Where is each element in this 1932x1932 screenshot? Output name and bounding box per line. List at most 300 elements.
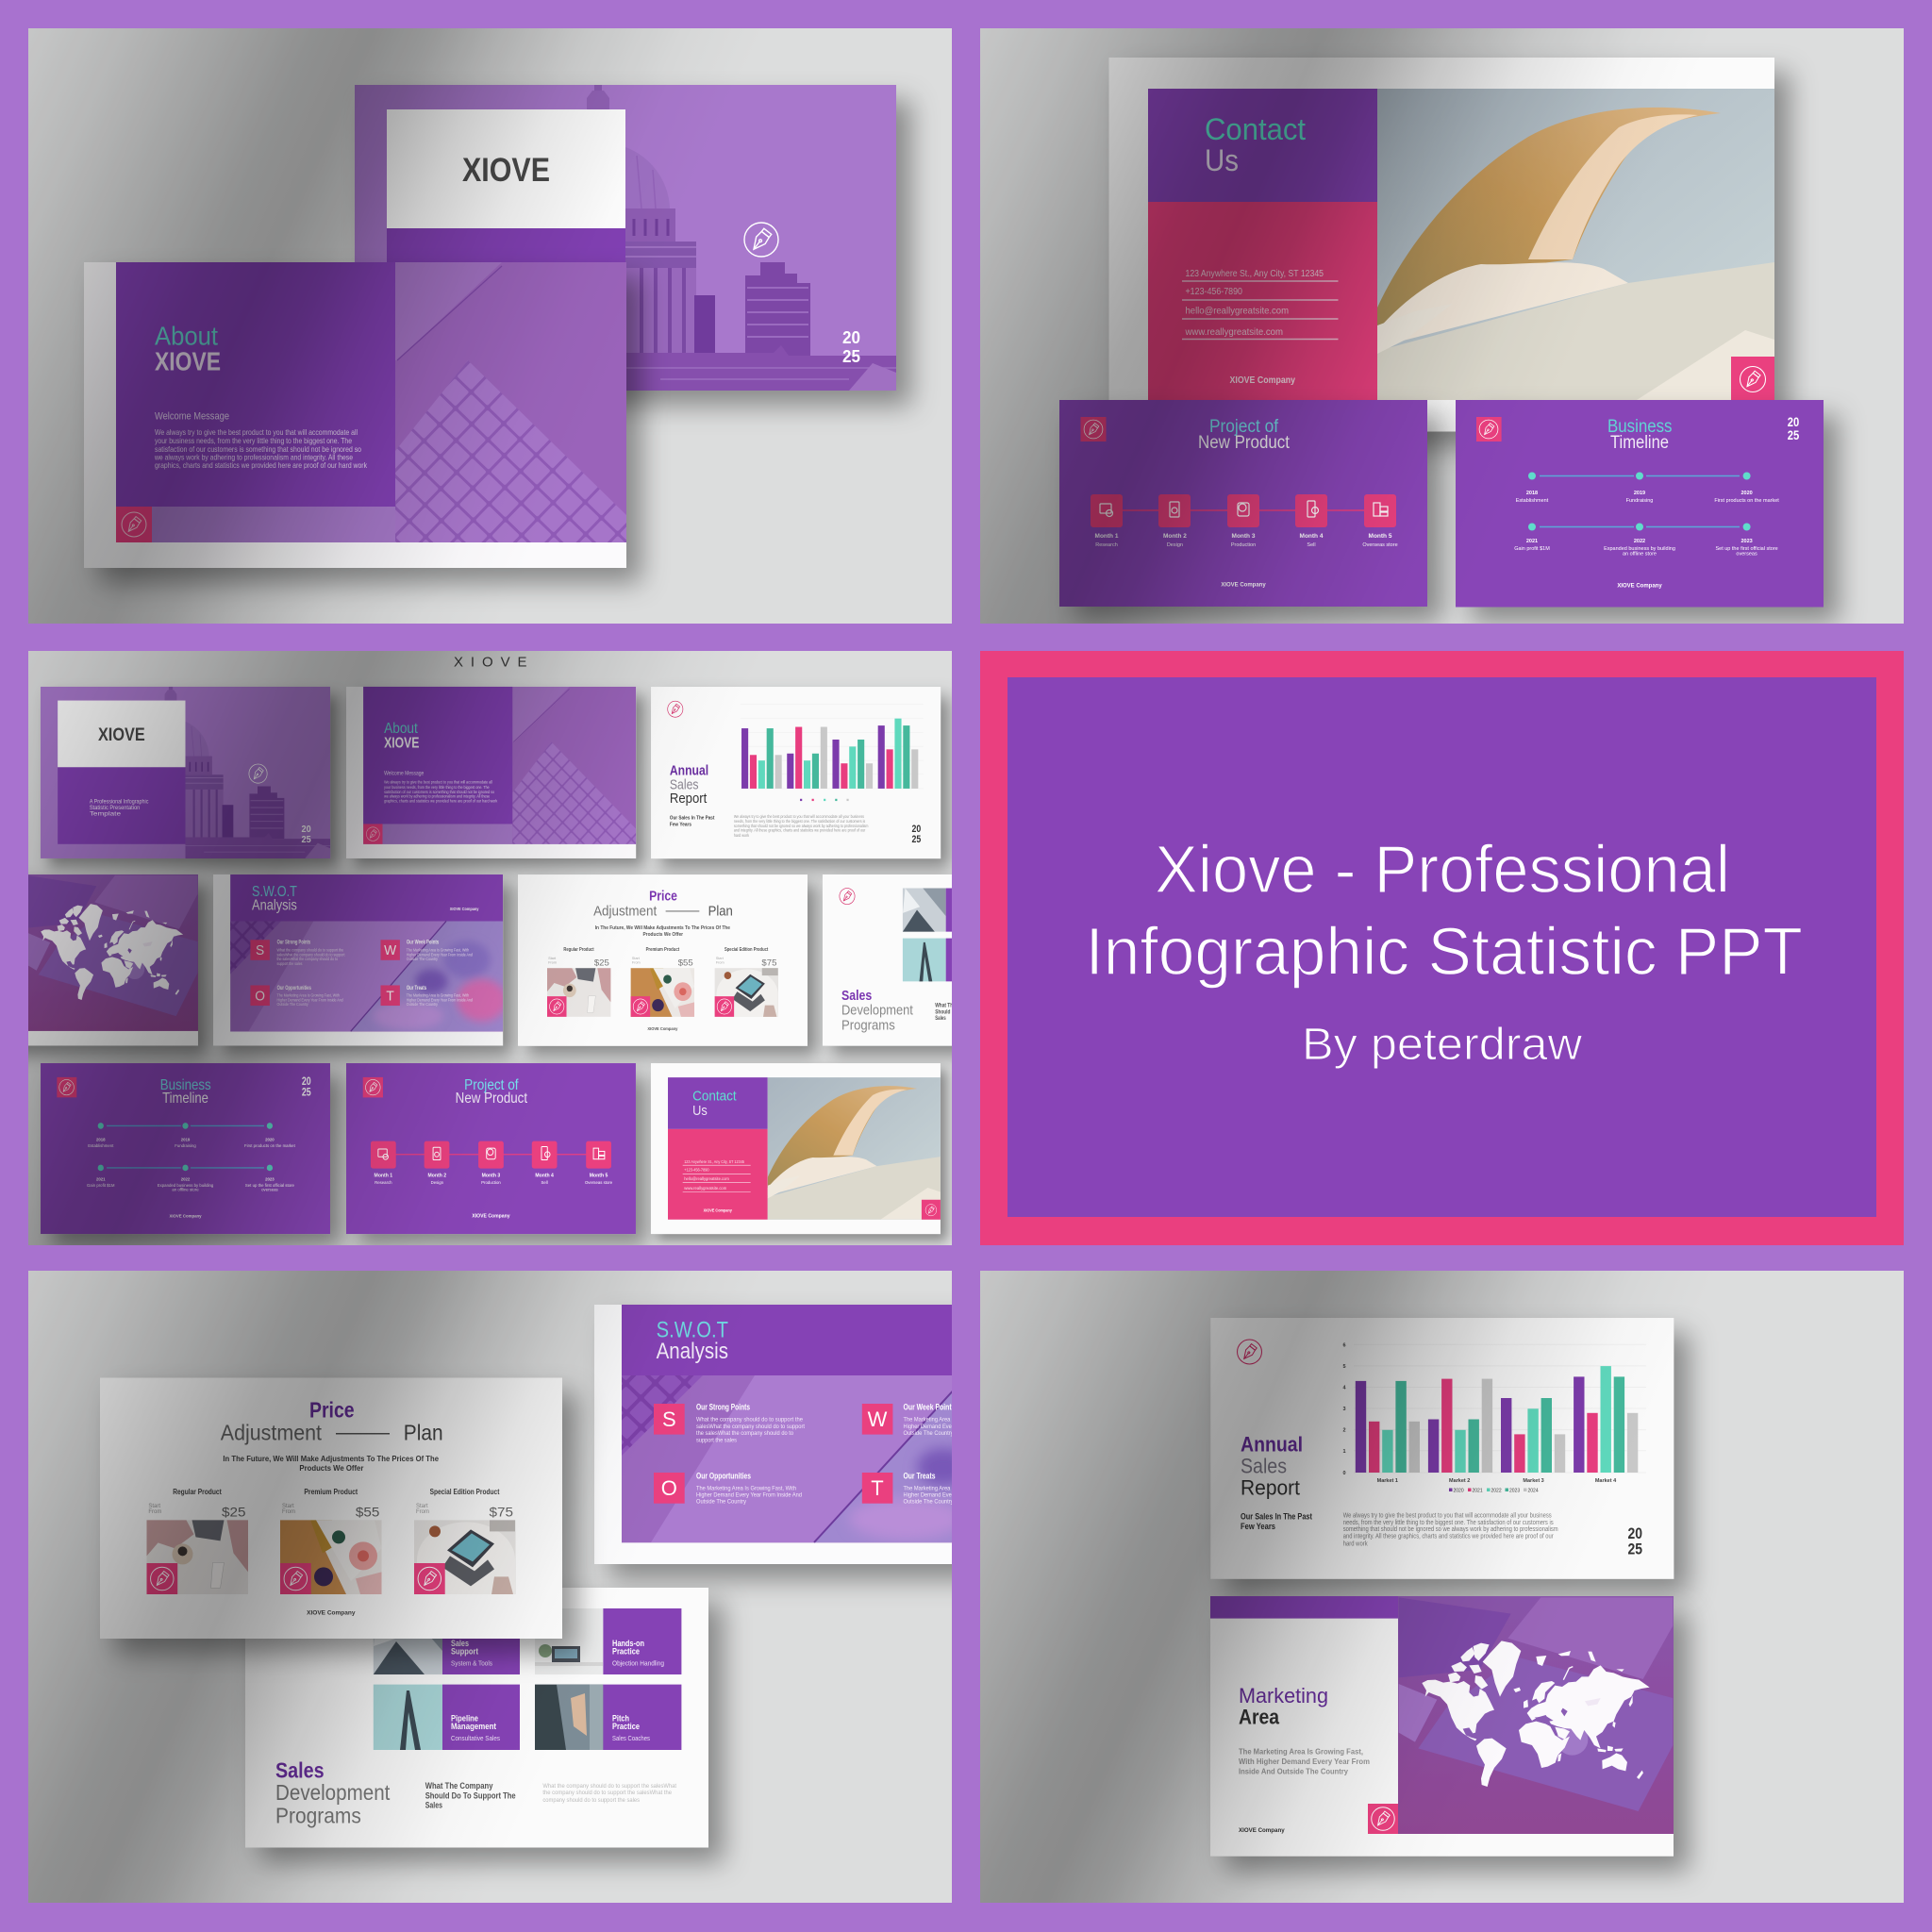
chart axis and legend labels: 6 bbox=[1343, 1342, 1346, 1348]
thumbnail text: business timeline: an offline store bbox=[172, 1188, 199, 1192]
text block: SWOT points: Outside The Country bbox=[904, 1499, 954, 1506]
heading: Project of New Product bbox=[1199, 419, 1290, 448]
slide: Contact Us bbox=[1109, 58, 1774, 432]
program cards text: Support bbox=[451, 1647, 478, 1657]
labels: project months: Production bbox=[1231, 542, 1256, 548]
text block: welcome message: satisfaction of our customers is something that should not be ignored so bbox=[155, 444, 361, 454]
labels: S W O T letters bbox=[661, 1407, 888, 1500]
text block: what the company should do bbox=[425, 1781, 516, 1810]
label: XIOVE Company: XIOVE Company bbox=[307, 1610, 356, 1617]
labels: timeline milestones: an offline store bbox=[1623, 551, 1657, 557]
text block: welcome message: graphics, charts and statistics we provided here are proof of our hard work bbox=[155, 460, 368, 470]
text block: SWOT points: Outside The Country bbox=[696, 1499, 747, 1506]
text block: SWOT points: Our Treats bbox=[904, 1472, 936, 1481]
thumbnail text: project of new product: Month 2 bbox=[428, 1174, 446, 1179]
program cards text: Pitch bbox=[612, 1713, 629, 1723]
text block: subtitle: Products We Offer bbox=[299, 1463, 364, 1473]
chart axis and legend labels: Market 1 bbox=[1377, 1478, 1398, 1484]
text block: supporting paragraph bbox=[542, 1783, 676, 1804]
labels: timeline milestones: Establishment bbox=[1516, 498, 1549, 504]
text block: report paragraph: hard work bbox=[1343, 1541, 1368, 1547]
chart axis and legend labels: 2024 bbox=[1528, 1489, 1539, 1494]
program cards text: System & Tools bbox=[451, 1658, 492, 1667]
thumbnail text: about: Welcome Message bbox=[384, 771, 425, 777]
labels: timeline milestones: 2019 bbox=[1634, 491, 1645, 496]
year label: 2025: 25 bbox=[1788, 427, 1799, 442]
thumbnail text: business timeline: Expanded business by building bbox=[158, 1183, 214, 1188]
thumbnail text: project of new product: Sell bbox=[541, 1180, 548, 1185]
program cards text: Consultative Sales bbox=[451, 1734, 500, 1742]
thumbnail text: SWOT analysis bbox=[252, 884, 479, 1007]
program cards text: Practice bbox=[612, 1722, 640, 1731]
heading: Marketing Area bbox=[1239, 1684, 1328, 1729]
panel: slide overview grid bbox=[0, 651, 1112, 1245]
text block: contact details bbox=[1185, 269, 1324, 338]
heading: S.W.O.T Analysis bbox=[657, 1318, 728, 1364]
panel: title card bbox=[980, 651, 1904, 1245]
thumbnail text: project of new product: Month 5 bbox=[590, 1174, 608, 1179]
labels: project months: Sell bbox=[1307, 542, 1316, 548]
thumbnail text: SWOT analysis: The Marketing Area Is Growing Fast, With bbox=[407, 992, 470, 998]
title: Xiove - Professional Infographic Statistic PPT: Xiove - Professional bbox=[1155, 833, 1730, 908]
text block: welcome message: your business needs, from the very little thing to the biggest one. The bbox=[155, 436, 352, 445]
labels: project months: Design bbox=[1167, 542, 1183, 548]
thumbnail text: business timeline: XIOVE Company bbox=[169, 1214, 202, 1219]
text block: SWOT points: salesWhat the company should do to support bbox=[696, 1424, 805, 1430]
labels: project months: Month 5 bbox=[1369, 533, 1392, 540]
thumbnail text: annual sales report bbox=[670, 762, 921, 845]
text block: SWOT points: Higher Demand Every Year From Inside And bbox=[696, 1492, 802, 1498]
thumbnail text: project of new product: Month 1 bbox=[375, 1174, 392, 1179]
thumbnail text: price adjustment plan: Adjustment bbox=[593, 904, 657, 920]
year label: 2025: 25 bbox=[842, 347, 860, 366]
heading: Project of New Product: Project of bbox=[1209, 417, 1279, 437]
thumbnail: project of new product bbox=[346, 1063, 636, 1234]
labels: products and prices: Regular Product bbox=[173, 1488, 222, 1496]
year label: 2025: 20 bbox=[1628, 1524, 1642, 1542]
heading: S.W.O.T Analysis: S.W.O.T bbox=[657, 1318, 728, 1343]
thumbnail text: price adjustment plan: Plan bbox=[708, 904, 733, 920]
thumbnail: annual sales report bbox=[651, 687, 941, 858]
text block: contact details: +123-456-7890 bbox=[1185, 287, 1242, 297]
thumbnail text: annual sales report: 20 bbox=[912, 824, 921, 835]
text block: contact details: hello@reallygreatsite.com bbox=[1185, 307, 1289, 317]
heading: Business Timeline bbox=[1608, 419, 1672, 448]
text block: contact details: www.reallygreatsite.com bbox=[1185, 327, 1283, 338]
text block: SWOT points: The Marketing Area Is Growing Fast, With bbox=[904, 1417, 1004, 1424]
chart axis and legend labels: 3 bbox=[1343, 1407, 1346, 1412]
thumbnail text: sales development programs: Programs bbox=[841, 1018, 895, 1033]
heading: Annual Sales Report: Report bbox=[1241, 1475, 1300, 1499]
thumbnail text: SWOT analysis: Outside The Country bbox=[407, 957, 439, 961]
thumbnail: price adjustment plan bbox=[518, 874, 808, 1046]
thumbnail text: price adjustment plan: Regular Product bbox=[563, 947, 594, 953]
labels: products and prices: Start bbox=[148, 1504, 160, 1509]
thumbnail text: business timeline: 2019 bbox=[181, 1137, 191, 1142]
program cards text: Pipeline bbox=[451, 1713, 478, 1723]
thumbnail text: price adjustment plan: From bbox=[548, 960, 557, 964]
program cards text bbox=[451, 1639, 664, 1742]
heading: S.W.O.T Analysis: Analysis bbox=[657, 1339, 728, 1364]
program cards text: Objection Handling bbox=[612, 1658, 664, 1667]
chart axis and legend labels: Market 3 bbox=[1523, 1478, 1544, 1484]
text block: SWOT points: Our Opportunities bbox=[696, 1472, 751, 1481]
thumbnail text: SWOT analysis: Our Week Points bbox=[407, 940, 439, 946]
labels: project months: Month 1 bbox=[1095, 533, 1119, 540]
text block: report paragraph: We always try to give the best product to you that will accommodate all your business bbox=[1343, 1513, 1552, 1520]
thumbnail text: cover: Template bbox=[90, 811, 121, 818]
thumbnail text: SWOT analysis: XIOVE Company bbox=[450, 907, 479, 911]
thumbnail text: price adjustment plan: $75 bbox=[761, 958, 776, 968]
thumbnail text: business timeline: Business bbox=[160, 1077, 211, 1093]
thumbnail text: SWOT analysis: Higher Demand Every Year From Inside And bbox=[407, 997, 473, 1002]
panel: contact, project and timeline slides mockup bbox=[980, 28, 1904, 624]
labels: products and prices: Premium Product bbox=[304, 1488, 358, 1496]
text block: supporting paragraph: company should do to support the sales bbox=[542, 1797, 641, 1804]
thumbnail text: business timeline: Timeline bbox=[162, 1091, 208, 1107]
thumbnail text: about: satisfaction of our customers is something that should not be ignored so bbox=[384, 790, 494, 794]
text block: marketing description bbox=[1239, 1747, 1370, 1775]
heading: Sales Development Programs: Development bbox=[275, 1780, 391, 1805]
labels: products and prices: Start bbox=[416, 1504, 428, 1509]
thumbnail text: contact us: hello@reallygreatsite.com bbox=[684, 1176, 729, 1181]
thumbnail text: about: About bbox=[384, 721, 419, 737]
thumbnail text: business timeline: 2018 bbox=[96, 1137, 106, 1142]
heading: Sales Development Programs: Sales bbox=[275, 1758, 325, 1783]
labels: S W O T letters: T bbox=[871, 1476, 884, 1500]
slide: XIOVE cover bbox=[355, 85, 896, 391]
labels: project months: Month 2 bbox=[1163, 533, 1187, 540]
program cards text: Management bbox=[451, 1722, 496, 1731]
thumbnail text: price adjustment plan: Start bbox=[716, 957, 724, 960]
text block: marketing description: Inside And Outside The Country bbox=[1239, 1766, 1348, 1775]
thumbnail text: SWOT analysis: The Marketing Area Is Growing Fast, With bbox=[277, 992, 340, 998]
thumbnail text: price adjustment plan: Products We Offer bbox=[642, 932, 684, 938]
text block: contact details: 123 Anywhere St., Any City, ST 12345 bbox=[1185, 269, 1324, 279]
thumbnail text: business timeline: 2021 bbox=[96, 1176, 106, 1182]
text block: report paragraph bbox=[1343, 1513, 1558, 1547]
thumbnail text: price adjustment plan: Start bbox=[548, 957, 557, 960]
thumbnail text: cover: Statistic Presentation bbox=[90, 805, 141, 811]
text block: supporting paragraph: What the company should do to support the salesWhat bbox=[542, 1783, 676, 1790]
heading: About XIOVE bbox=[155, 326, 221, 371]
text block: report paragraph: needs, from the very little thing to the biggest one. The satisfaction of our customers is bbox=[1343, 1520, 1554, 1526]
program cards text: Sales bbox=[451, 1639, 469, 1648]
labels: products and prices: Start bbox=[282, 1504, 294, 1509]
text block: what the company should do: Sales bbox=[425, 1801, 442, 1810]
text block: SWOT points: the salesWhat the company should do to bbox=[696, 1430, 793, 1437]
thumbnail text: price adjustment plan: XIOVE Company bbox=[647, 1026, 678, 1031]
thumbnail text: SWOT analysis: salesWhat the company should do to support bbox=[277, 952, 345, 957]
thumbnail text: SWOT analysis: S bbox=[256, 942, 264, 958]
program cards text: Hands-on bbox=[612, 1639, 644, 1648]
labels: timeline milestones: 2018 bbox=[1526, 491, 1538, 496]
thumbnail text: annual sales report: Few Years bbox=[670, 822, 691, 827]
text block: subtitle: In The Future, We Will Make Adjustments To The Prices Of The bbox=[223, 1454, 439, 1463]
thumbnail text: price adjustment plan bbox=[548, 889, 776, 1031]
chart axis and legend labels: Market 4 bbox=[1595, 1478, 1617, 1484]
thumbnail text: project of new product: Month 4 bbox=[535, 1174, 554, 1179]
thumbnail text: annual sales report: something that should not be ignored so we always work by adhering to professionalism bbox=[734, 824, 869, 828]
thumbnail text: price adjustment plan: Start bbox=[632, 957, 641, 960]
thumbnail text: SWOT analysis: Outside The Country bbox=[277, 1002, 309, 1007]
heading: Project of New Product: New Product bbox=[1198, 433, 1291, 453]
labels: timeline milestones: overseas bbox=[1736, 551, 1757, 557]
thumbnail text: business timeline: overseas bbox=[261, 1188, 278, 1192]
thumbnail: sales development programs bbox=[823, 874, 1112, 1046]
label: XIOVE Company: XIOVE Company bbox=[1230, 375, 1295, 386]
thumbnail text: business timeline: First products on the market bbox=[244, 1143, 296, 1148]
thumbnail text: annual sales report: Our Sales In The Past bbox=[670, 815, 714, 821]
labels: timeline milestones: Set up the first official store bbox=[1715, 546, 1778, 552]
text block: SWOT points: Higher Demand Every Year From Inside And bbox=[904, 1424, 1009, 1430]
thumbnail text: SWOT analysis: Higher Demand Every Year From Inside And bbox=[407, 952, 473, 957]
thumbnail: SWOT analysis bbox=[213, 874, 507, 1045]
thumbnail text: project of new product: New Product bbox=[456, 1091, 528, 1107]
text block: SWOT points: What the company should do to support the bbox=[696, 1417, 803, 1424]
panel: annual report and marketing slides mockup bbox=[980, 1271, 1904, 1903]
bar chart: sales by market bbox=[1210, 1318, 1674, 1579]
year label: 2025 bbox=[1628, 1524, 1642, 1558]
subtitle: By peterdraw: By peterdraw bbox=[1302, 1020, 1582, 1070]
heading: About XIOVE: XIOVE bbox=[155, 347, 221, 375]
thumbnail text: about: we always work by adhering to professionalism and integrity. All these bbox=[384, 794, 491, 799]
labels: project months bbox=[1095, 533, 1398, 548]
labels: products and prices: From bbox=[416, 1509, 429, 1515]
labels: products and prices: Special Edition Product bbox=[430, 1488, 500, 1496]
slide: Marketing Area bbox=[1210, 1596, 1674, 1857]
thumbnail text: annual sales report: Sales bbox=[670, 776, 699, 791]
thumbnail text: SWOT analysis: Higher Demand Every Year From Inside And bbox=[277, 997, 343, 1002]
chart axis and legend labels bbox=[1343, 1342, 1617, 1494]
thumbnail text: SWOT analysis: Outside The Country bbox=[407, 1002, 439, 1007]
thumbnail text: contact us: +123-456-7890 bbox=[684, 1168, 709, 1173]
labels: products and prices: From bbox=[282, 1509, 295, 1515]
thumbnail text: annual sales report: Annual bbox=[670, 762, 708, 777]
thumbnail text: price adjustment plan: $55 bbox=[678, 958, 693, 968]
thumbnail text: project of new product: XIOVE Company bbox=[472, 1213, 510, 1219]
panel: cover and about slides mockup bbox=[28, 28, 952, 624]
labels: timeline milestones: Expanded business by building bbox=[1604, 546, 1675, 552]
text block: report paragraph: something that should not be ignored so we always work by adhering to professionalism bbox=[1343, 1526, 1558, 1533]
title: Xiove - Professional Infographic Statistic PPT: Infographic Statistic PPT bbox=[1085, 915, 1803, 990]
heading: Business Timeline: Business bbox=[1607, 417, 1672, 437]
thumbnail text: project of new product: Design bbox=[431, 1180, 444, 1185]
thumbnail text: SWOT analysis: S.W.O.T bbox=[252, 884, 297, 900]
thumbnail text: about: your business needs, from the very little thing to the biggest one. The bbox=[384, 785, 490, 790]
text block: SWOT points: Our Strong Points bbox=[696, 1402, 750, 1411]
thumbnail text: SWOT analysis: Our Opportunities bbox=[277, 986, 311, 991]
labels: S W O T letters: S bbox=[662, 1407, 676, 1431]
text block: SWOT points: support the sales bbox=[696, 1437, 738, 1443]
chart axis and legend labels: 4 bbox=[1343, 1385, 1347, 1391]
text block: welcome message: we always work by adhering to professionalism and integrity. All these bbox=[154, 453, 353, 462]
chart axis and legend labels: 2020 bbox=[1453, 1489, 1464, 1494]
heading: XIOVE: XIOVE bbox=[462, 152, 550, 189]
text block: SWOT points: The Marketing Area Is Growing Fast, With bbox=[904, 1485, 1004, 1491]
thumbnail text: business timeline: Fundraising bbox=[175, 1143, 196, 1148]
text block: what the company should do: What The Company bbox=[425, 1781, 492, 1790]
text block: welcome message: We always try to give the best product to you that will accommodate all bbox=[155, 427, 358, 437]
heading: Price Adjustment Plan bbox=[221, 1398, 443, 1445]
thumbnail text: price adjustment plan: From bbox=[716, 960, 724, 964]
thumbnail text: sales development programs: Should Do To Support The bbox=[935, 1009, 992, 1015]
thumbnail text: SWOT analysis: O bbox=[255, 988, 265, 1003]
label: XIOVE Company: XIOVE Company bbox=[1239, 1827, 1285, 1834]
text block: what the company should do: Should Do To Support The bbox=[425, 1791, 516, 1801]
text block: supporting paragraph: the company should do to support the salesWhat the bbox=[542, 1790, 672, 1796]
labels: project months: Month 3 bbox=[1232, 533, 1256, 540]
thumbnail text: annual sales report: hard work bbox=[734, 833, 750, 838]
slide: Business Timeline bbox=[1456, 400, 1824, 608]
labels: timeline milestones: 2022 bbox=[1634, 539, 1645, 544]
thumbnail text: about: graphics, charts and statistics we provided here are proof of our hard work bbox=[384, 798, 498, 803]
title: Xiove - Professional Infographic Statistic PPT bbox=[1085, 833, 1803, 990]
text block: SWOT points: The Marketing Area Is Growing Fast, With bbox=[696, 1485, 796, 1491]
heading: About XIOVE: About bbox=[155, 321, 218, 351]
chart axis and legend labels: 1 bbox=[1343, 1449, 1346, 1455]
text block: SWOT points: Our Week Points bbox=[904, 1402, 955, 1411]
thumbnail text: cover: A Professional Infographic bbox=[90, 798, 149, 805]
thumbnail text: price adjustment plan: Special Edition Product bbox=[724, 947, 768, 953]
labels: timeline milestones: 2020 bbox=[1740, 491, 1753, 496]
chart axis and legend labels: 2022 bbox=[1491, 1489, 1502, 1494]
thumbnail text: sales development programs: Sales bbox=[841, 988, 872, 1004]
world map image bbox=[1210, 1596, 1674, 1857]
thumbnail text: SWOT analysis: support the sales bbox=[277, 961, 302, 966]
labels: timeline milestones: Gain profit $1M bbox=[1514, 546, 1550, 552]
heading: Price Adjustment Plan: Price bbox=[309, 1398, 355, 1423]
thumbnail text: sales development programs: Development bbox=[841, 1003, 913, 1018]
text block: subtitle: Few Years bbox=[1241, 1522, 1275, 1531]
thumbnail text: annual sales report: 25 bbox=[912, 834, 921, 845]
thumbnail text: sales development programs: What The Company bbox=[935, 1003, 978, 1008]
thumbnail text: project of new product: Production bbox=[481, 1180, 501, 1185]
chart axis and legend labels: 2 bbox=[1343, 1428, 1346, 1434]
thumbnail text: about bbox=[384, 721, 498, 803]
text block: SWOT points bbox=[696, 1402, 1009, 1506]
thumbnail text: SWOT analysis: W bbox=[384, 942, 397, 958]
thumbnail text: project of new product: Project of bbox=[464, 1077, 519, 1093]
heading: Annual Sales Report: Annual bbox=[1241, 1433, 1303, 1457]
thumbnail: contact us bbox=[651, 1063, 941, 1234]
heading: X I O V E: XIOVE bbox=[454, 655, 526, 670]
thumbnail text: project of new product: Month 3 bbox=[482, 1174, 500, 1179]
heading: Marketing Area: Marketing bbox=[1239, 1684, 1328, 1707]
thumbnail text: SWOT analysis: T bbox=[386, 988, 394, 1003]
thumbnail text: about: XIOVE bbox=[384, 735, 419, 751]
thumbnail text: about: We always try to give the best product to you that will accommodate all bbox=[384, 780, 492, 785]
chart axis and legend labels: 5 bbox=[1343, 1364, 1346, 1370]
thumbnail text: business timeline: 2020 bbox=[265, 1137, 275, 1142]
thumbnail: cover bbox=[41, 687, 330, 858]
labels: project months: Month 4 bbox=[1300, 533, 1324, 540]
thumbnail: about bbox=[346, 687, 636, 858]
chart axis and legend labels: 0 bbox=[1343, 1471, 1346, 1476]
text block: welcome message: Welcome Message bbox=[155, 411, 229, 423]
heading: Annual Sales Report bbox=[1241, 1433, 1303, 1499]
text block: marketing description: With Higher Demand Every Year From bbox=[1239, 1757, 1370, 1766]
thumbnail text: cover: 20 bbox=[302, 824, 311, 835]
thumbnail text: SWOT analysis: the salesWhat the company should do to bbox=[277, 957, 339, 961]
thumbnail text: contact us: Contact bbox=[692, 1089, 737, 1105]
thumbnail text: project of new product bbox=[375, 1077, 613, 1219]
year label: 2025: 20 bbox=[842, 328, 860, 347]
thumbnail: business timeline bbox=[41, 1063, 330, 1234]
text block: welcome message bbox=[154, 411, 368, 470]
thumbnail text: price adjustment plan: In The Future, We Will Make Adjustments To The Prices Of The bbox=[595, 925, 730, 931]
labels: timeline milestones: 2021 bbox=[1526, 539, 1538, 544]
thumbnail text: sales development programs bbox=[841, 988, 992, 1033]
labels: timeline milestones: 2023 bbox=[1740, 539, 1753, 544]
panel: price, SWOT and sales slides mockup bbox=[28, 1271, 1063, 1903]
labels: products and prices: $75 bbox=[489, 1504, 513, 1519]
labels: project months: Research bbox=[1095, 542, 1118, 548]
heading: Contact Us: Us bbox=[1205, 143, 1239, 177]
heading: Business Timeline: Timeline bbox=[1610, 433, 1669, 453]
thumbnail text: SWOT analysis: Our Treats bbox=[407, 986, 426, 991]
thumbnail text: contact us: Us bbox=[692, 1104, 708, 1119]
heading: Price Adjustment Plan: Plan bbox=[404, 1421, 443, 1445]
chart axis and legend labels: 2023 bbox=[1509, 1489, 1520, 1494]
text block: SWOT points: Higher Demand Every Year From Inside And bbox=[904, 1492, 1009, 1498]
labels: timeline milestones bbox=[1514, 491, 1779, 557]
slide: Price Adjustment Plan bbox=[100, 1377, 562, 1639]
thumbnail text: annual sales report: needs, from the very little thing to the biggest one. The satisfaction of our customers is bbox=[734, 819, 866, 824]
labels: project months: Overseas store bbox=[1362, 542, 1398, 548]
thumbnail text: project of new product: Overseas store bbox=[585, 1180, 613, 1185]
thumbnail text: SWOT analysis: The Marketing Area Is Growing Fast, With bbox=[407, 947, 470, 953]
labels: timeline milestones: Fundraising bbox=[1626, 498, 1653, 504]
thumbnail text: cover: XIOVE bbox=[98, 725, 145, 745]
slide: Project of New Product bbox=[1059, 400, 1427, 607]
year label: 2025 bbox=[843, 331, 860, 362]
heading: Contact Us: Contact bbox=[1205, 112, 1306, 146]
thumbnail: marketing map bbox=[0, 874, 198, 1045]
thumbnail text: contact us: XIOVE Company bbox=[704, 1208, 732, 1213]
heading: Sales Development Programs: Programs bbox=[275, 1803, 361, 1827]
thumbnail text: business timeline: 20 bbox=[302, 1076, 311, 1088]
text block: marketing description: The Marketing Area Is Growing Fast, bbox=[1239, 1747, 1363, 1757]
thumbnail text: price adjustment plan: Price bbox=[649, 889, 677, 905]
heading: Contact Us bbox=[1206, 118, 1306, 172]
text block: subtitle bbox=[1241, 1511, 1312, 1531]
year label: 2025: 25 bbox=[1628, 1540, 1642, 1558]
heading: Price Adjustment Plan: Adjustment bbox=[221, 1421, 323, 1445]
program cards text: Sales Coaches bbox=[612, 1734, 650, 1742]
slide: Sales Development Programs bbox=[245, 1588, 708, 1847]
labels: S W O T letters: W bbox=[868, 1407, 888, 1431]
labels: S W O T letters: O bbox=[661, 1476, 677, 1500]
heading: Annual Sales Report: Sales bbox=[1241, 1455, 1287, 1478]
thumbnail text: business timeline: 25 bbox=[302, 1087, 311, 1099]
label: XIOVE Company: XIOVE Company bbox=[1617, 583, 1662, 589]
chart axis and legend labels: Market 2 bbox=[1449, 1478, 1470, 1484]
thumbnail text: business timeline bbox=[87, 1076, 311, 1219]
year label: 2025: 20 bbox=[1788, 414, 1799, 429]
slide: Annual Sales Report bbox=[1210, 1318, 1674, 1579]
thumbnail text: sales development programs: Sales bbox=[935, 1016, 946, 1022]
thumbnail text: price adjustment plan: Premium Product bbox=[646, 947, 679, 953]
thumbnail text: contact us: 123 Anywhere St., Any City, ST 12345 bbox=[684, 1159, 744, 1164]
thumbnail text: business timeline: 2023 bbox=[265, 1176, 275, 1182]
labels: timeline milestones: First products on the market bbox=[1714, 498, 1779, 504]
thumbnail text: SWOT analysis: What the company should do to support the bbox=[277, 947, 344, 953]
year label: 2025 bbox=[1788, 417, 1799, 440]
thumbnail text: business timeline: 2022 bbox=[181, 1176, 191, 1182]
thumbnail text: annual sales report: Report bbox=[670, 791, 707, 806]
thumbnail text: cover: 25 bbox=[302, 835, 311, 845]
